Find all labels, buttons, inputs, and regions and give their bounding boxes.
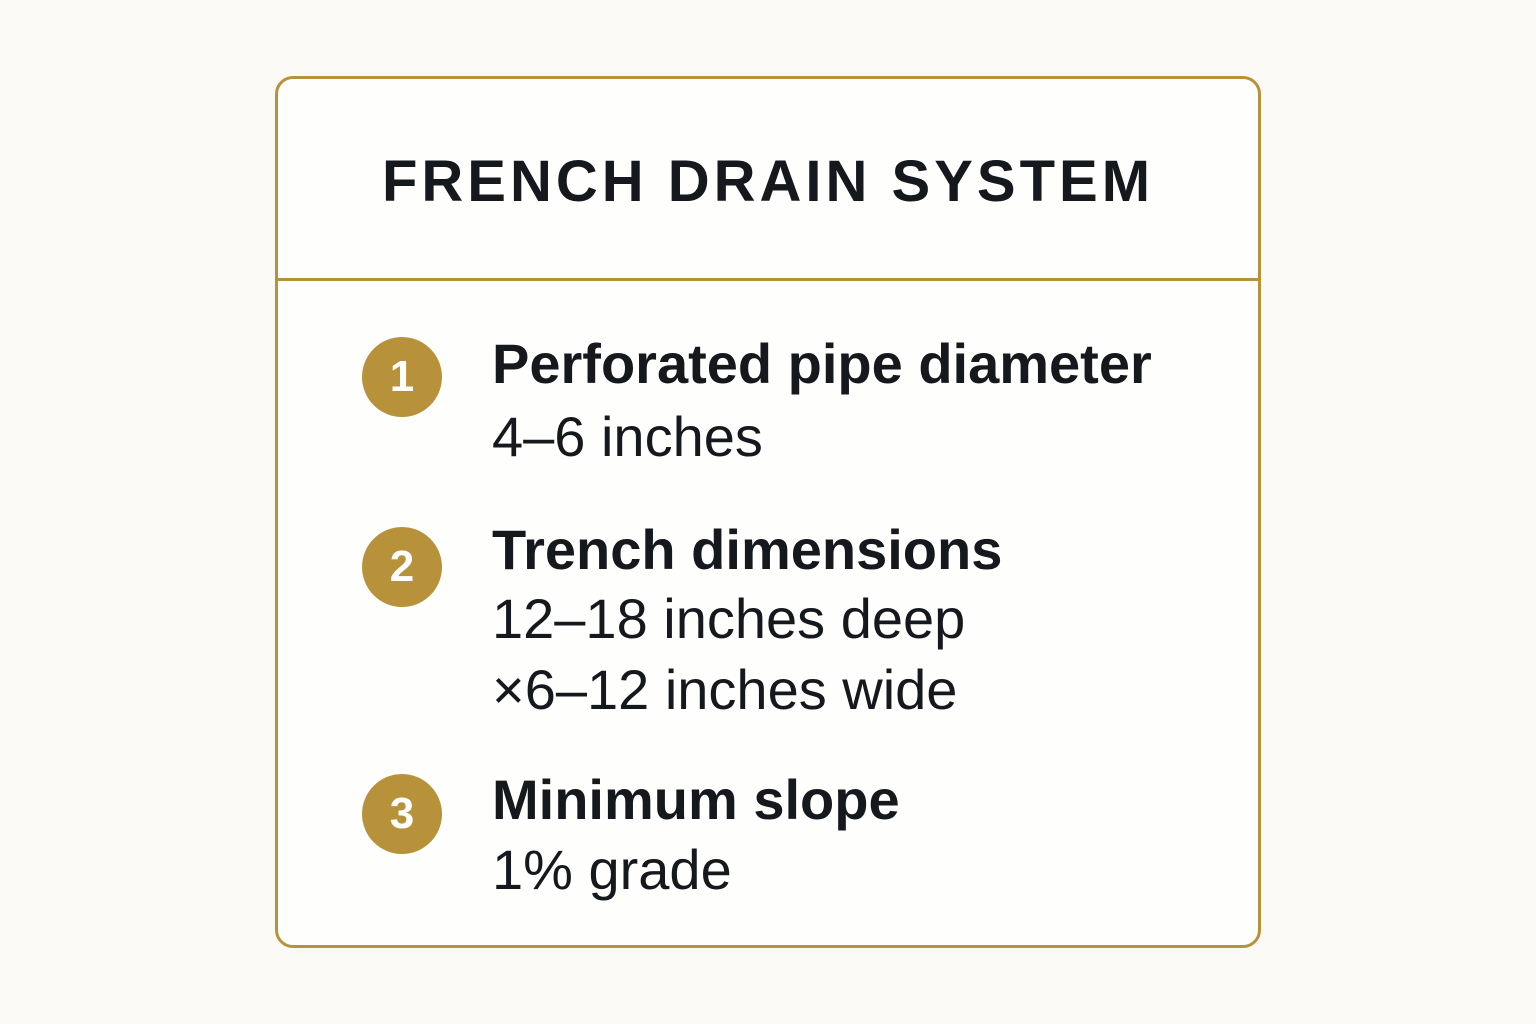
icon: number 2: 2 [390, 542, 414, 591]
item 2 value [492, 587, 965, 721]
item 3 value: 1% grade [492, 838, 732, 901]
icon: number 3: 3 [390, 789, 414, 838]
item 2 value: ×6–12 inches wide [492, 658, 957, 721]
item 2 heading: Trench dimensions [492, 518, 1002, 581]
item 1 value: 4–6 inches [492, 405, 763, 468]
icon: number 1 [362, 337, 442, 417]
item 2 value: 12–18 inches deep [492, 587, 965, 650]
item 1 heading: Perforated pipe diameter [492, 332, 1152, 395]
title: FRENCH DRAIN SYSTEM [382, 149, 1154, 214]
panel: card [275, 76, 1261, 948]
icon: number 3 [362, 774, 442, 854]
item 3 heading: Minimum slope [492, 768, 900, 831]
icon: number 1: 1 [390, 352, 414, 401]
icon: number 2 [362, 527, 442, 607]
